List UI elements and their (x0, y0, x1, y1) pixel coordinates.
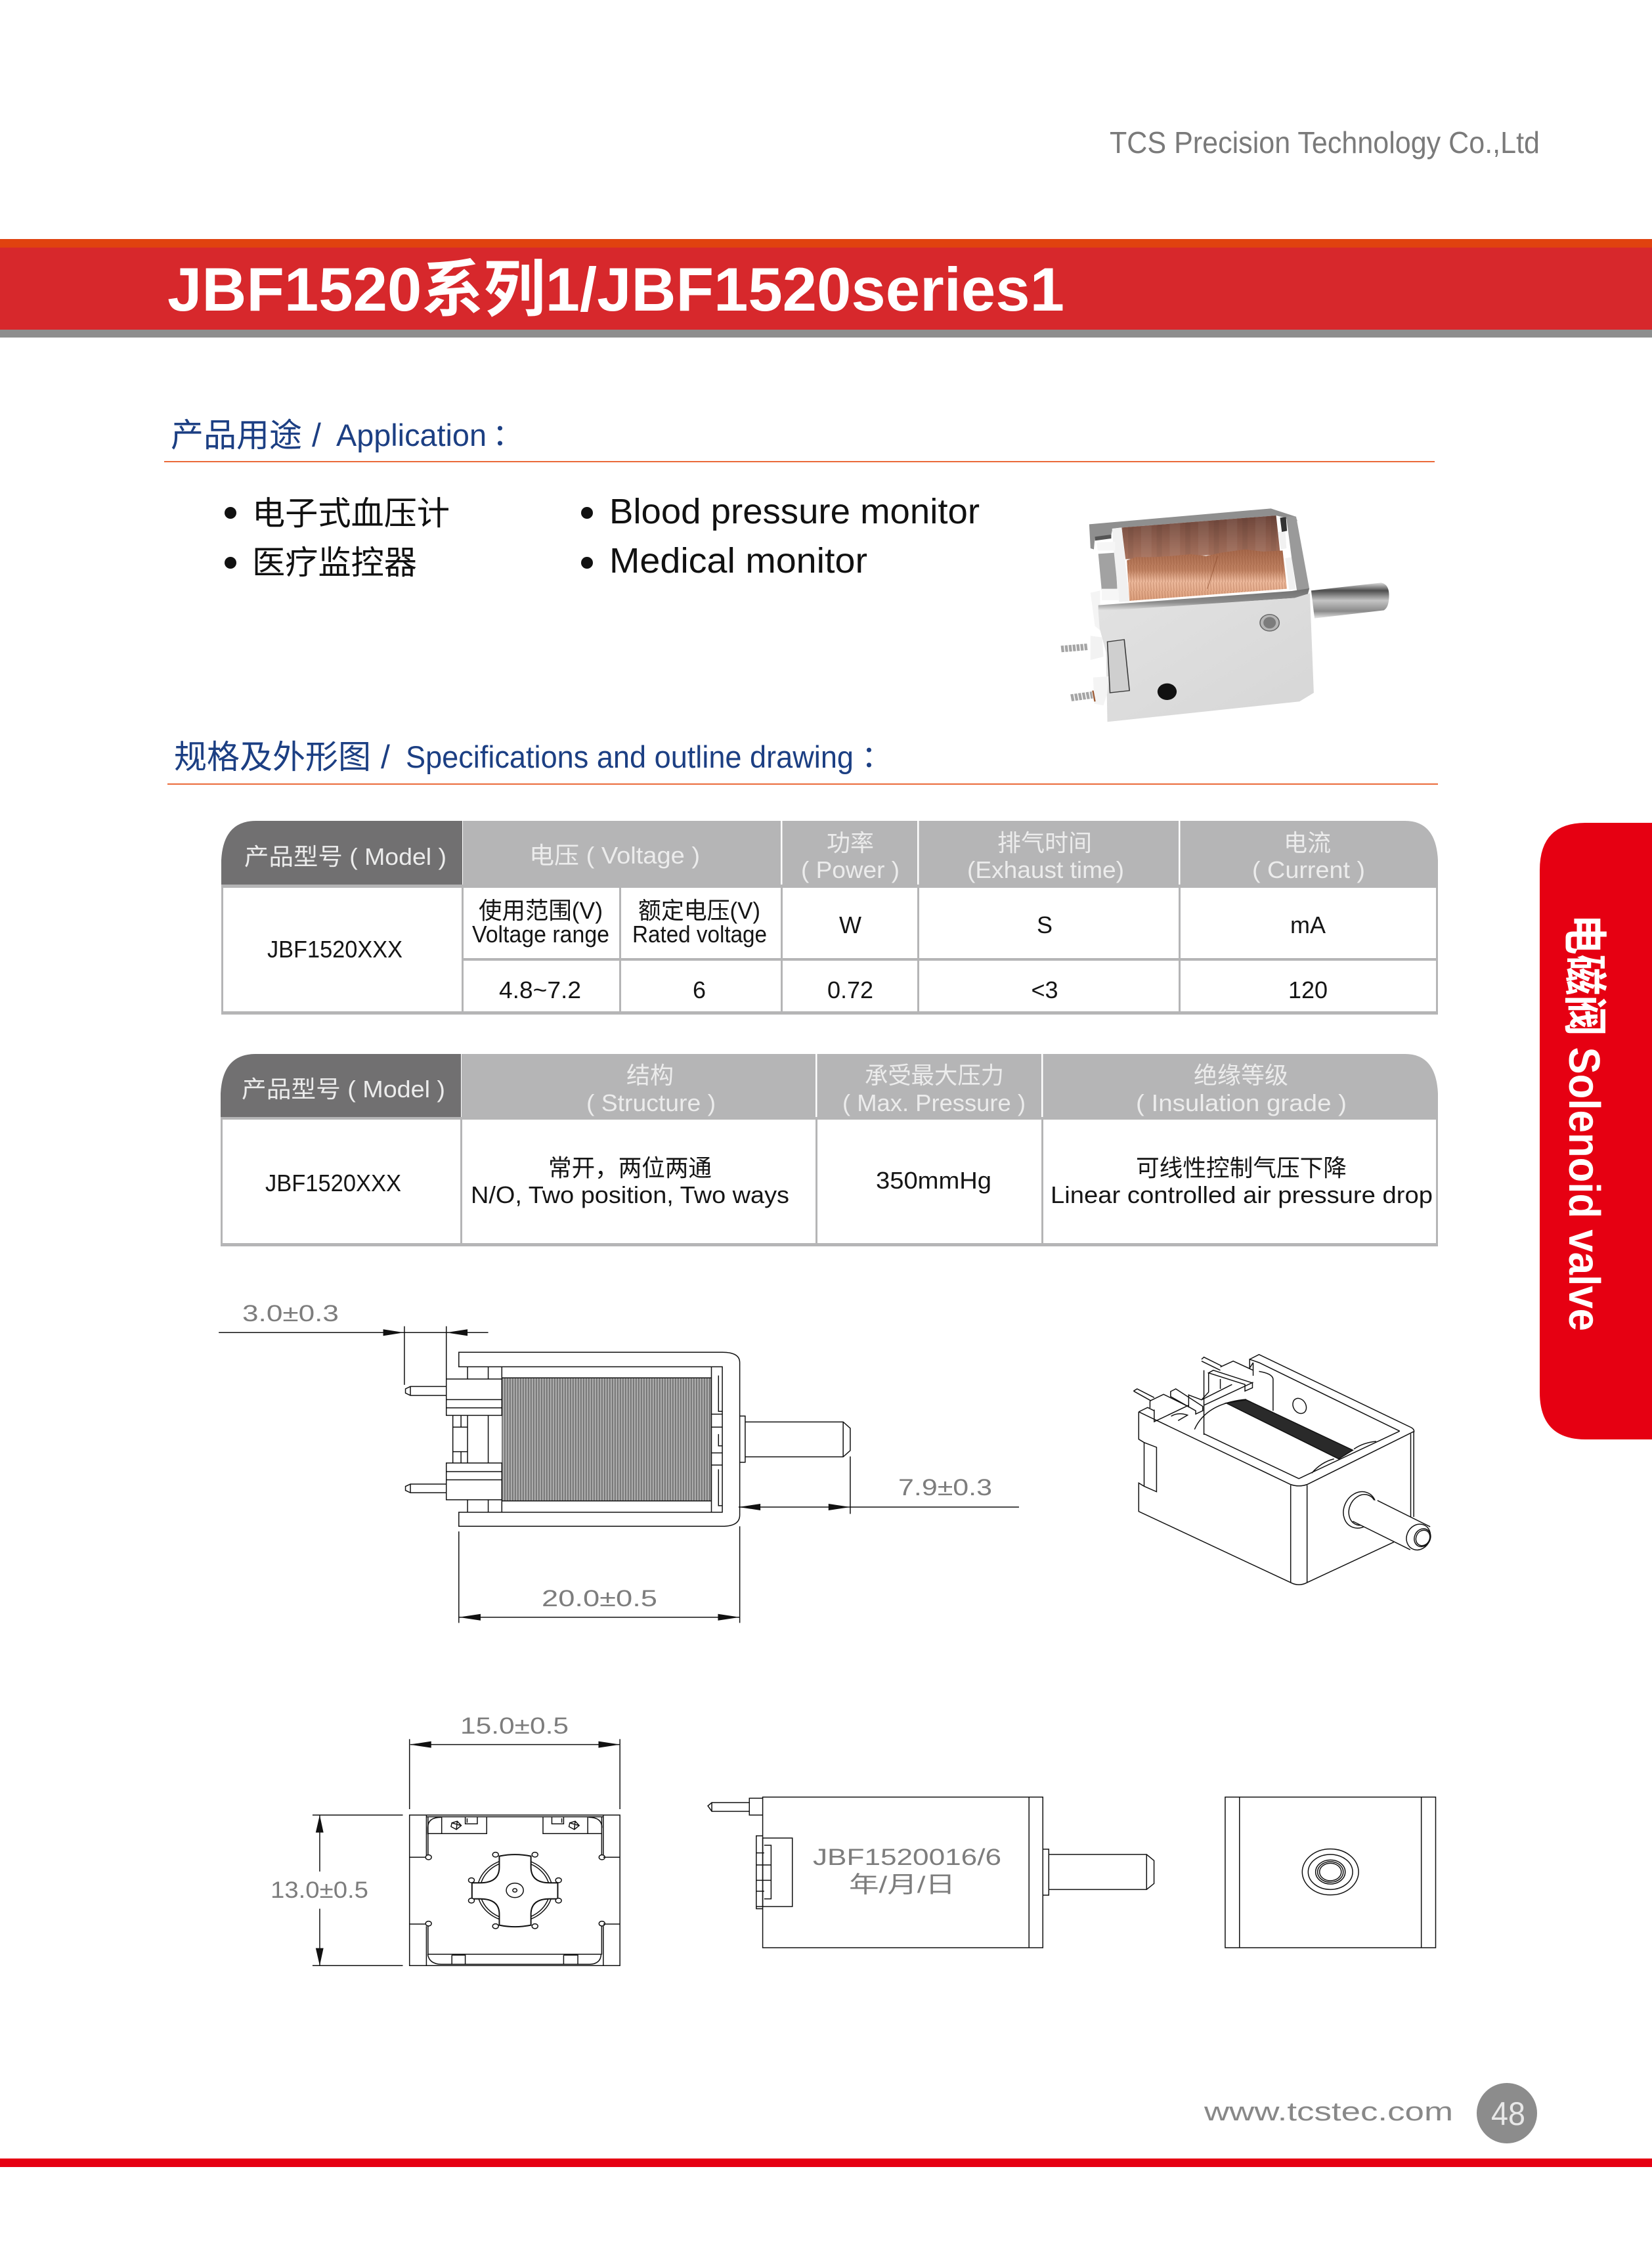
body cells: Linear controlled air pressure drop (1051, 1181, 1433, 1208)
table: structure and pressure specs (221, 1054, 1438, 1246)
dimension: shaft length: 7.9±0.3 (898, 1475, 992, 1501)
header cells: 绝缘等级 (1194, 1062, 1288, 1089)
body cells: W (839, 911, 861, 938)
body cells: S (1037, 911, 1053, 938)
page number: 48 (1491, 2095, 1525, 2132)
body cells: Voltage range (472, 921, 609, 948)
date marking: 年/月/日 (849, 1872, 955, 1898)
body cells: 可线性控制气压下降 (1136, 1154, 1347, 1181)
body cells: 350mmHg (876, 1167, 991, 1194)
header cells: 功率 (827, 829, 874, 856)
dimension: body length: 20.0±0.5 (542, 1586, 657, 1611)
heading: specifications: / (381, 739, 390, 776)
body cells: 6 (693, 976, 706, 1003)
heading: application: 产品用途 (171, 417, 302, 454)
title banner (0, 239, 1652, 338)
application list: English: Blood pressure monitor (609, 492, 980, 531)
table: voltage and electrical specs (221, 821, 1438, 1015)
drawing: end view (271, 1713, 620, 1965)
body cells: JBF1520XXX (265, 1170, 401, 1196)
header cells: ( Power ) (801, 856, 900, 883)
header cells: ( Insulation grade ) (1136, 1089, 1347, 1116)
header cells (244, 829, 1365, 883)
heading: specifications: 规格及外形图 (174, 739, 371, 776)
application list: Chinese: 电子式血压计 (252, 495, 450, 532)
application list: English: Medical monitor (609, 541, 867, 581)
header cells: 产品型号 ( Model ) (244, 843, 446, 870)
title: JBF1520系列1/JBF1520series1 (167, 255, 1064, 324)
dimension: height: 13.0±0.5 (271, 1877, 368, 1903)
side tab label: 电磁阀 Solenoid valve (1559, 914, 1609, 1331)
body cells (265, 1154, 1433, 1208)
header cells: ( Max. Pressure ) (842, 1089, 1026, 1116)
dimension: width: 15.0±0.5 (460, 1713, 569, 1739)
website: www.tcstec.com (1204, 2097, 1453, 2126)
application list: Chinese (225, 495, 450, 581)
header cells: 承受最大压力 (865, 1062, 1004, 1089)
body cells (267, 897, 1328, 1003)
header cells: 电压 ( Voltage ) (529, 842, 700, 869)
header cells: ( Structure ) (586, 1089, 716, 1116)
drawing: top view with marking (708, 1797, 1154, 1948)
header cells: 排气时间 (997, 829, 1092, 856)
body cells: 常开，两位两通 (548, 1154, 712, 1181)
company name: TCS Precision Technology Co.,Ltd (1110, 125, 1540, 160)
body cells: Rated voltage (632, 921, 767, 948)
application list: Chinese: 医疗监控器 (252, 544, 417, 581)
heading: application: ： (492, 418, 523, 452)
heading: application: Application (336, 418, 487, 452)
heading: specifications: ： (861, 739, 892, 774)
heading: specifications: Specifications and outline drawing (406, 739, 854, 774)
header cells (242, 1062, 1347, 1116)
header cells: (Exhaust time) (967, 856, 1124, 883)
heading: specifications (174, 739, 892, 776)
part number marking: JBF1520016/6 (813, 1845, 1001, 1870)
drawing: front view (1225, 1797, 1435, 1948)
header cells: ( Current ) (1252, 856, 1365, 883)
heading: application: / (312, 417, 321, 454)
body cells: JBF1520XXX (267, 936, 402, 963)
heading: application (171, 417, 523, 454)
body cells: 120 (1288, 976, 1328, 1003)
header cells: 结构 (626, 1062, 674, 1089)
body cells: mA (1290, 911, 1326, 938)
drawing: isometric view (1133, 1355, 1434, 1585)
body cells: 0.72 (827, 976, 873, 1003)
page number (1477, 2083, 1537, 2143)
application list: English (581, 492, 980, 581)
drawing: side section view (219, 1301, 1019, 1623)
body cells: 4.8~7.2 (499, 976, 581, 1003)
header cells: 产品型号 ( Model ) (242, 1076, 445, 1103)
body cells: N/O, Two position, Two ways (471, 1181, 789, 1208)
dimension: pin length: 3.0±0.3 (242, 1301, 339, 1326)
header cells: 电流 (1284, 829, 1331, 856)
body cells: 额定电压(V) (638, 897, 760, 924)
side tab (1540, 823, 1652, 1439)
body cells: 使用范围(V) (479, 897, 603, 924)
product photo (1061, 508, 1389, 722)
body cells: <3 (1031, 976, 1058, 1003)
